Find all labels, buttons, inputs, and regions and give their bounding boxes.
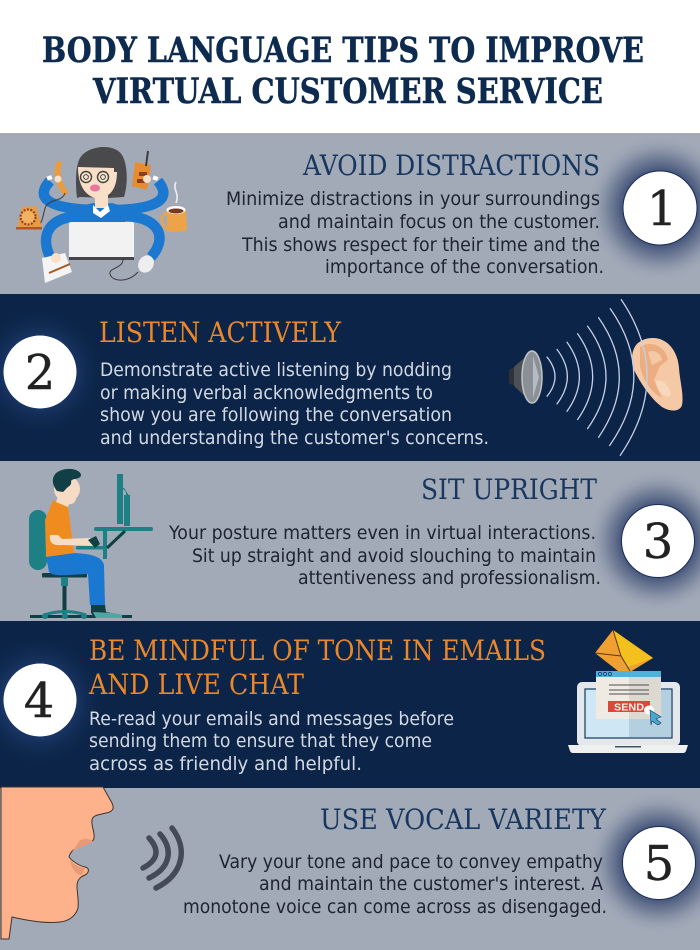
text block: avoid distractions: This shows respect for their time and the [241,234,600,256]
heading: sit upright: SIT UPRIGHT [421,473,597,506]
panel: listen actively [0,294,700,461]
text block: listen actively [100,359,489,449]
text block: avoid distractions: and maintain focus on the customer. [278,211,600,233]
heading: be mindful of tone: AND LIVE CHAT [88,668,304,701]
heading: avoid distractions: AVOID DISTRACTIONS [302,149,600,182]
text block: listen actively: or making verbal acknowledgments to [100,382,433,404]
text block: be mindful of tone: across as friendly and helpful. [89,753,362,775]
heading: use vocal variety: USE VOCAL VARIETY [320,803,606,836]
icon: sound waves [143,828,181,888]
number badge 3 [622,504,694,578]
panel: mindful tone [0,621,700,788]
icon: man sitting upright at desk [29,469,153,619]
number badge 4: 4 [24,673,54,729]
heading: be mindful of tone: BE MINDFUL OF TONE IN EMAILS [89,634,546,667]
panel: sit upright [0,461,700,621]
number badge 1: 1 [647,181,677,237]
icon: speaking face [1,787,113,939]
number badge 1 [623,171,697,245]
text block: avoid distractions [226,188,604,278]
text block: listen actively: Demonstrate active listening by nodding [100,359,452,381]
text block: be mindful of tone: sending them to ensure that they come [89,730,432,752]
text block: use vocal variety: and maintain the customer's interest. A [259,873,603,895]
text block: avoid distractions: importance of the conversation. [325,256,604,278]
text block: sit upright: Your posture matters even in virtual interactions. [168,522,596,544]
panel: vocal variety [0,787,700,950]
number badge 5 [622,826,696,900]
text block: avoid distractions: Minimize distractions in your surroundings [226,188,600,210]
text block: listen actively: and understanding the customer's concerns. [100,427,489,449]
number badge 2 [4,336,76,408]
icon: distracted woman at laptop [16,147,187,283]
icon: email on laptop: SEND [614,702,644,714]
panel: avoid distractions [0,133,700,294]
number badge 4 [4,664,76,736]
heading: be mindful of tone [88,634,546,701]
text block: listen actively: show you are following the conversation [100,404,452,426]
icon: speaker, sound waves and ear [509,299,683,456]
number badge 3: 3 [643,514,673,570]
number badge 5: 5 [644,836,674,892]
text block: sit upright: attentiveness and professionalism. [298,567,601,589]
icon: email on laptop [568,630,688,753]
text block: use vocal variety: monotone voice can come across as disengaged. [183,896,607,918]
text block: use vocal variety [183,851,607,918]
heading: listen actively: LISTEN ACTIVELY [99,316,341,349]
title [42,30,644,112]
text block: be mindful of tone: Re-read your emails and messages before [89,708,454,730]
title: VIRTUAL CUSTOMER SERVICE [92,71,603,112]
text block: sit upright: Sit up straight and avoid slouching to maintain [192,545,596,567]
text block: sit upright [168,522,601,589]
text block: use vocal variety: Vary your tone and pace to convey empathy [219,851,603,873]
text block: be mindful of tone [89,708,454,775]
number badge 2: 2 [25,345,55,401]
